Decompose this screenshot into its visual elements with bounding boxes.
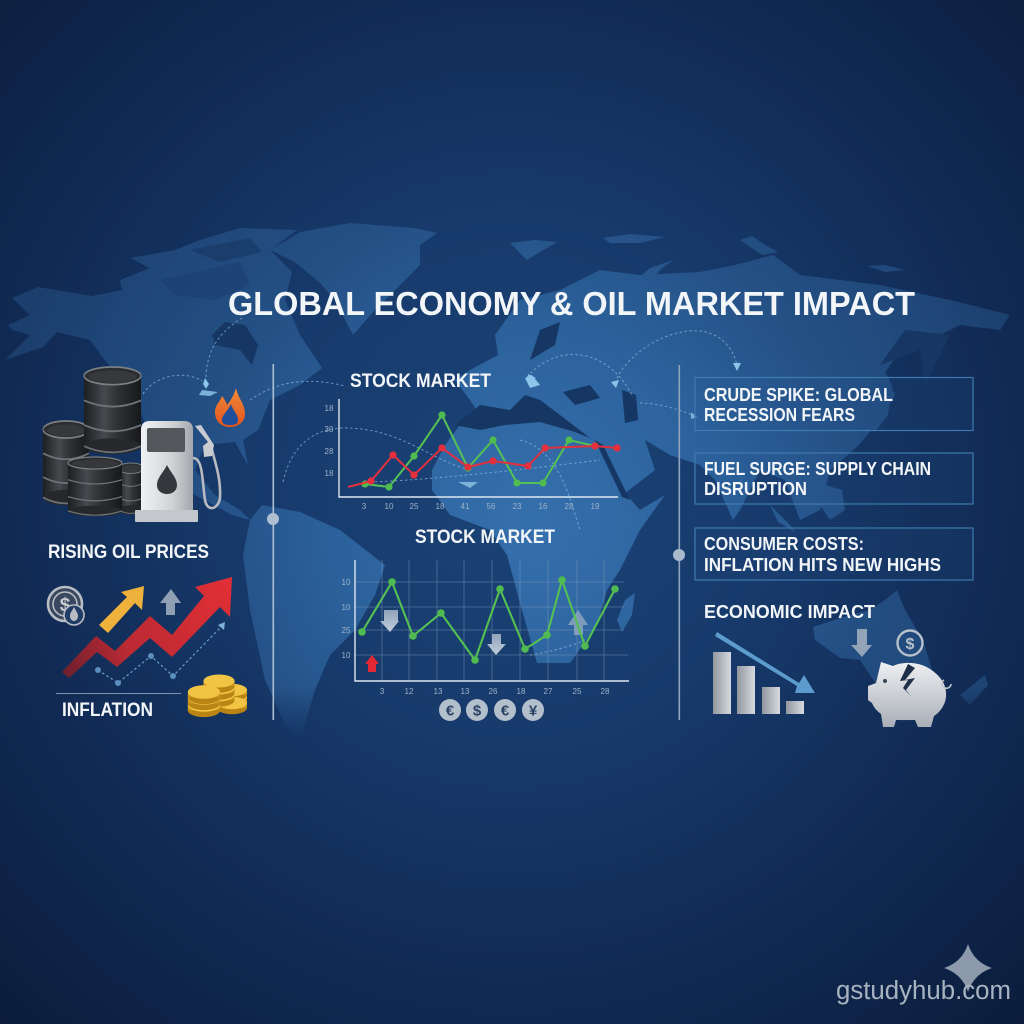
icons: currency coins <box>439 699 544 721</box>
dotted trend line <box>95 622 225 686</box>
icons: currency coins: ¥ <box>529 702 538 720</box>
chart: stock market line chart 1: 16 <box>539 502 548 511</box>
chart: stock market line chart 1: 25 <box>410 502 419 511</box>
icon: dollar and oil coin: $ <box>60 595 71 616</box>
callout: consumer costs <box>695 528 973 580</box>
bar chart: declining bars <box>713 652 804 714</box>
watermark star <box>944 944 992 992</box>
chart: stock market line chart 2: 10 <box>342 578 351 587</box>
chart: stock market line chart 2: 12 <box>405 687 414 696</box>
icon: dollar circle <box>898 630 922 656</box>
chart: stock market line chart 2: 13 <box>461 687 470 696</box>
callout: consumer costs: CONSUMER COSTS: <box>704 534 864 554</box>
chart: stock market line chart 1: 18 <box>325 469 334 478</box>
icons: currency coins: € <box>501 702 510 720</box>
icon: dollar circle: $ <box>906 636 915 653</box>
chart: stock market line chart 2: 27 <box>544 687 553 696</box>
heading: economic impact: ECONOMIC IMPACT <box>704 602 875 622</box>
callout: fuel surge: FUEL SURGE: SUPPLY CHAIN <box>704 459 931 479</box>
label: inflation: INFLATION <box>62 700 153 721</box>
chart: stock market line chart 2: 13 <box>434 687 443 696</box>
icon: fuel pump <box>135 421 220 522</box>
chart: stock market line chart 2: 25 <box>342 626 351 635</box>
callout: fuel surge: DISRUPTION <box>704 479 807 499</box>
chart: stock market line chart 1: 10 <box>385 502 394 511</box>
chart: stock market line chart 1: 23 <box>513 502 522 511</box>
chart: stock market line chart 1: 30 <box>325 425 334 434</box>
icon: gold coins <box>188 674 247 717</box>
heading: stock market 2: STOCK MARKET <box>415 527 555 548</box>
dashed route arcs <box>143 318 741 655</box>
chart: stock market line chart 2: 26 <box>489 687 498 696</box>
chart: stock market line chart 1: 56 <box>487 502 496 511</box>
arrow: grey down <box>851 629 872 657</box>
arrow: yellow up <box>99 586 144 633</box>
chart: stock market line chart 1: 28 <box>565 502 574 511</box>
left divider with node <box>267 364 279 720</box>
chart: stock market line chart 1 <box>325 399 621 511</box>
right divider with node <box>673 365 685 720</box>
icons: currency coins: € <box>446 702 455 720</box>
icon: dollar and oil coin <box>48 587 84 625</box>
chart: stock market line chart 1: 3 <box>362 502 367 511</box>
arrow: red rising <box>62 577 232 678</box>
label: rising oil prices: RISING OIL PRICES <box>48 542 209 563</box>
chart: stock market line chart 2: 28 <box>601 687 610 696</box>
icon: flame <box>215 388 245 427</box>
chart: stock market line chart 2 <box>342 560 629 696</box>
heading: stock market 1: STOCK MARKET <box>350 371 491 392</box>
chart: stock market line chart 2: 10 <box>342 651 351 660</box>
chart: stock market line chart 1: 19 <box>591 502 600 511</box>
chart: stock market line chart 1: 18 <box>325 404 334 413</box>
world map <box>5 223 1010 740</box>
icon: oil barrels <box>43 367 144 516</box>
callout: crude spike <box>695 378 973 430</box>
callout: fuel surge <box>695 453 973 504</box>
callout: crude spike: RECESSION FEARS <box>704 405 855 425</box>
chart: stock market line chart 1: 28 <box>325 447 334 456</box>
chart: stock market line chart 2: 25 <box>573 687 582 696</box>
callout: consumer costs: INFLATION HITS NEW HIGHS <box>704 555 941 575</box>
arrow: grey up <box>160 589 181 615</box>
chart: stock market line chart 2: 18 <box>517 687 526 696</box>
watermark text: gstudyhub.com <box>836 977 1011 1005</box>
chart: stock market line chart 2: 3 <box>380 687 385 696</box>
chart: stock market line chart 2: 10 <box>342 603 351 612</box>
callout: crude spike: CRUDE SPIKE: GLOBAL <box>704 385 893 405</box>
chart: stock market line chart 1: 41 <box>461 502 470 511</box>
icons: currency coins: $ <box>473 702 482 720</box>
title: GLOBAL ECONOMY & OIL MARKET IMPACT <box>228 285 915 322</box>
chart: stock market line chart 1: 18 <box>436 502 445 511</box>
icon: broken piggy bank <box>868 662 951 727</box>
arrow: blue decline <box>715 632 815 693</box>
inflation rule <box>56 693 181 694</box>
